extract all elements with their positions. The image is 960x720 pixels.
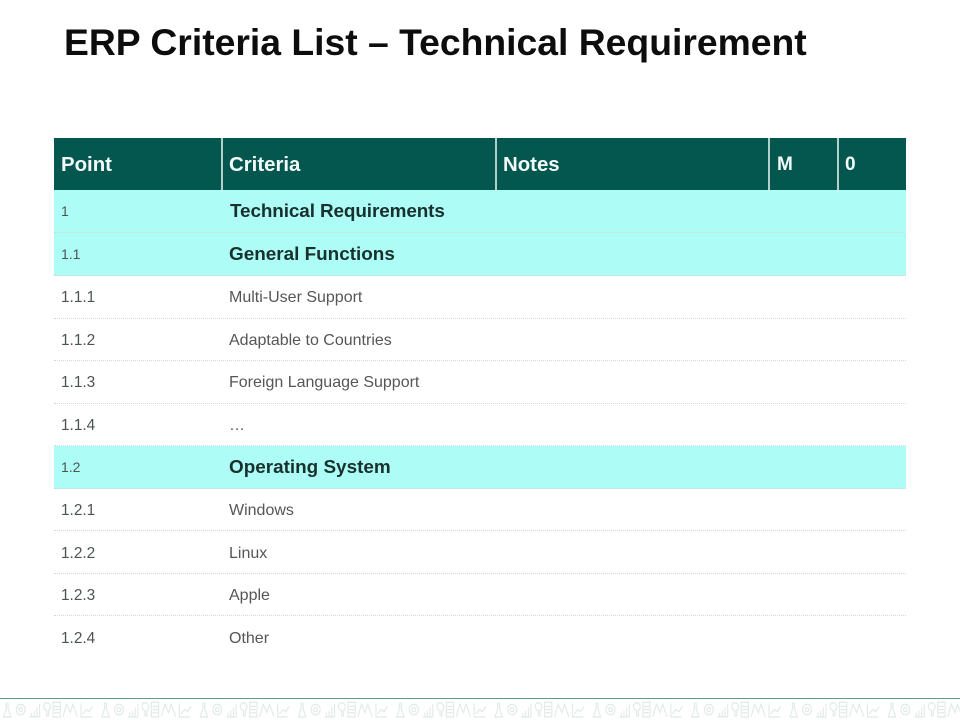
- row 1.1.3: 1.1.3: [61, 374, 95, 391]
- table header row: Notes: [503, 154, 560, 176]
- row 1.1.1: [54, 276, 906, 319]
- row 1.1: 1.1: [61, 246, 80, 262]
- row 1.2.3: [54, 573, 906, 616]
- footer icon band: [0, 698, 960, 718]
- row 1.1: General Functions: [229, 244, 395, 265]
- row 1.2.4: Other: [229, 630, 269, 647]
- row 1.1.3: Foreign Language Support: [229, 374, 419, 391]
- row 1.1.2: Adaptable to Countries: [229, 332, 392, 349]
- row 1.1.4: 1.1.4: [61, 417, 95, 434]
- table header row: Point: [61, 154, 112, 176]
- row 1.2.3: 1.2.3: [61, 587, 95, 604]
- row 1.2.1: [54, 488, 906, 531]
- row 1.1.1: 1.1.1: [61, 289, 95, 306]
- title: ERP Criteria List – Technical Requirement: [64, 21, 807, 63]
- row 1.2: 1.2: [61, 459, 80, 475]
- row 1.2.4: 1.2.4: [61, 630, 95, 647]
- row 1: Technical Requirements: [230, 201, 445, 222]
- row 1.2.1: Windows: [229, 502, 294, 519]
- table header row: Criteria: [229, 154, 300, 176]
- table header row: 0: [845, 154, 856, 175]
- row 1.2.1: 1.2.1: [61, 502, 95, 519]
- table header row: [54, 138, 906, 190]
- row 1.1.2: 1.1.2: [61, 332, 95, 349]
- table header row: M: [777, 154, 793, 175]
- row 1: 1: [61, 203, 69, 219]
- row 1.2: Operating System: [229, 457, 391, 478]
- row 1.1.1: Multi-User Support: [229, 289, 362, 306]
- row 1.1.2: [54, 318, 906, 361]
- row 1.2.4: [61, 630, 269, 647]
- row 1.2: [54, 446, 906, 489]
- row 1.2.2: 1.2.2: [61, 545, 95, 562]
- row 1.1.4: [54, 403, 906, 446]
- row 1.2.3: Apple: [229, 587, 270, 604]
- row 1: [54, 190, 906, 233]
- row 1.2.2: [54, 531, 906, 574]
- criteria table: [54, 138, 906, 647]
- row 1.1.4: …: [229, 417, 245, 434]
- row 1.2.2: Linux: [229, 545, 267, 562]
- row 1.1.3: [54, 361, 906, 404]
- row 1.1: [54, 233, 906, 276]
